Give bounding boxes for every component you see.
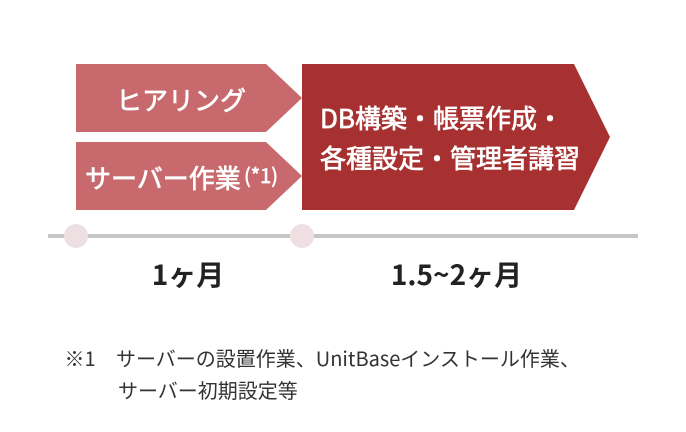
timeline marker: middle bbox=[290, 224, 314, 248]
arrow: DB build: DB構築・帳票作成・ bbox=[320, 99, 563, 136]
arrow: DB build: 各種設定・管理者講習 bbox=[320, 139, 580, 176]
duration label: 1.5-2 months: 1.5~2ヶ月 bbox=[391, 254, 522, 294]
timeline marker: start bbox=[64, 224, 88, 248]
arrow: hearing: ヒアリング bbox=[116, 81, 246, 118]
timeline bbox=[48, 224, 638, 248]
arrow: DB build bbox=[302, 64, 610, 210]
footnote: サーバーの設置作業、UnitBaseインストール作業、 bbox=[116, 343, 580, 372]
arrow: server work: (*1) bbox=[244, 160, 278, 189]
footnote: サーバー初期設定等 bbox=[118, 375, 298, 404]
duration label: 1 month: 1ヶ月 bbox=[152, 254, 224, 294]
footnote bbox=[64, 343, 580, 404]
arrow: server work bbox=[76, 142, 302, 210]
arrow: hearing bbox=[76, 64, 302, 132]
footnote: ※1 bbox=[64, 343, 96, 372]
arrow: server work: サーバー作業 bbox=[85, 159, 241, 196]
